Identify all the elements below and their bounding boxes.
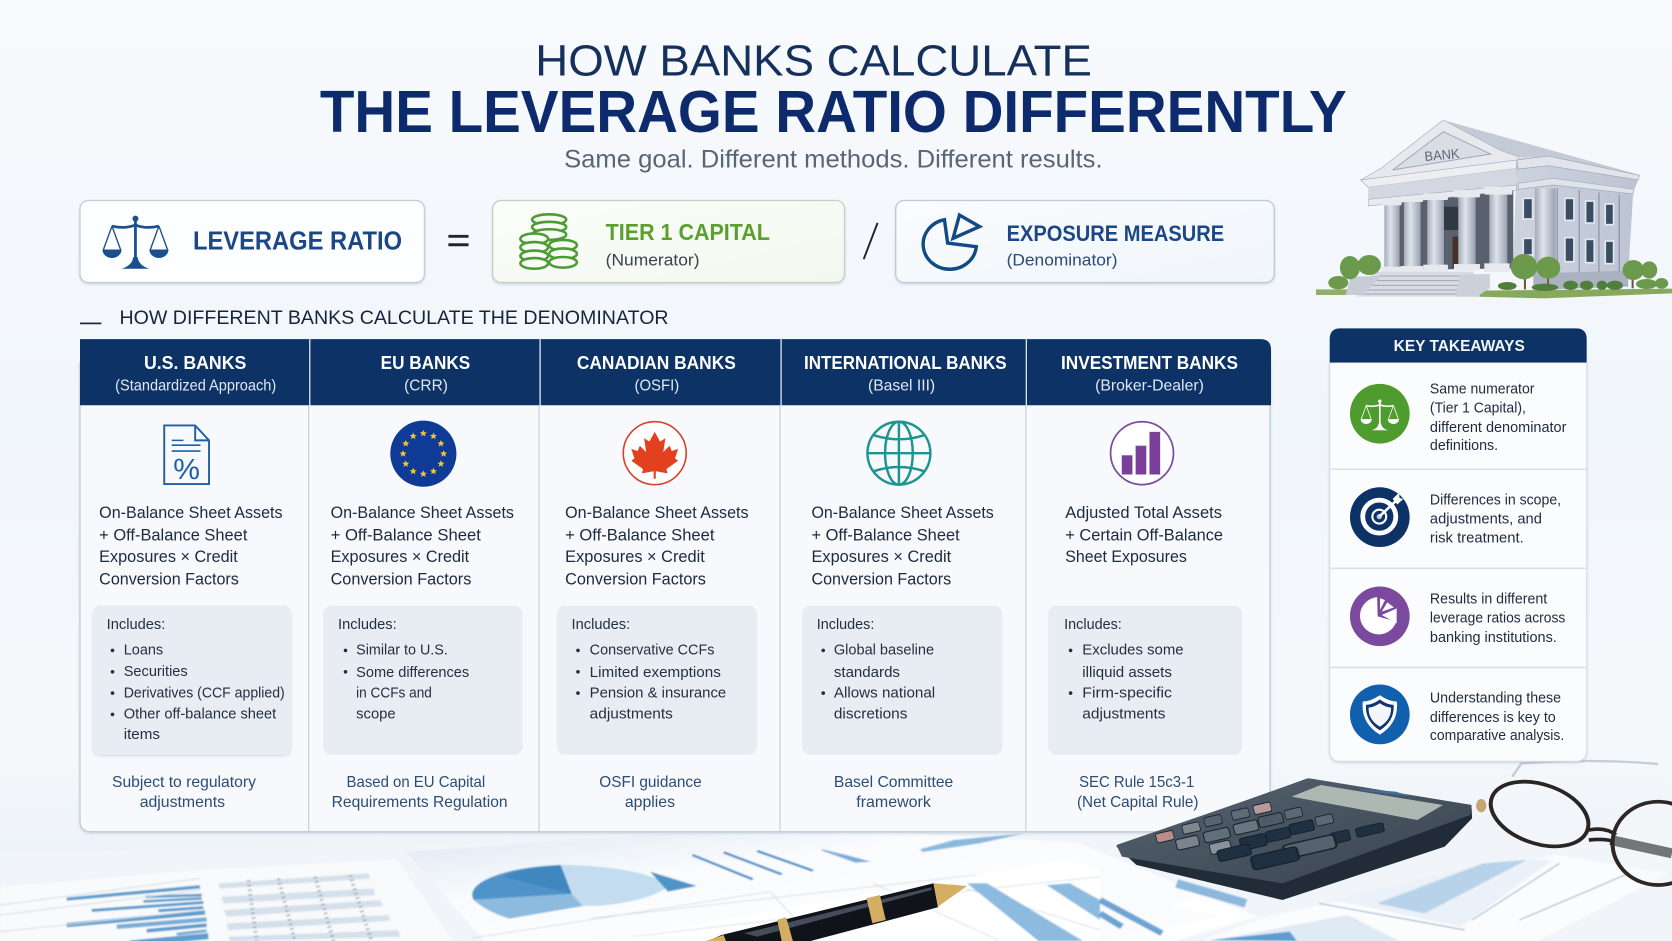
title: HOW BANKS CALCULATE bbox=[535, 37, 1092, 86]
steps bbox=[1346, 272, 1490, 297]
glasses bbox=[1476, 761, 1672, 885]
left bar chart bbox=[0, 878, 208, 941]
takeaway: differences: Differences in scope, bbox=[1430, 492, 1561, 508]
column: U.S. banks: + Off-Balance Sheet bbox=[99, 526, 248, 545]
column: U.S. banks: Loans bbox=[124, 642, 163, 659]
column: Canadian banks: Limited exemptions bbox=[590, 664, 721, 681]
formula: leverage ratio box: LEVERAGE RATIO bbox=[193, 228, 402, 256]
takeaway: understanding: differences is key to bbox=[1430, 710, 1556, 726]
column: international banks: discretions bbox=[834, 706, 907, 723]
takeaway: same numerator: different denominator bbox=[1430, 420, 1567, 436]
column: U.S. banks: Conversion Factors bbox=[99, 569, 239, 588]
formula: tier 1 capital box: TIER 1 CAPITAL bbox=[606, 219, 770, 245]
column: international banks: INTERNATIONAL BANKS bbox=[804, 353, 1007, 373]
column: investment banks: Includes: bbox=[1064, 616, 1122, 633]
column: investment banks: (Broker-Dealer) bbox=[1095, 377, 1204, 394]
slash bbox=[864, 223, 878, 259]
takeaway: understanding bbox=[1350, 685, 1564, 744]
column: EU banks: Conversion Factors bbox=[331, 569, 471, 588]
column: EU banks: EU BANKS bbox=[381, 353, 470, 373]
column: international banks: Global baseline bbox=[834, 642, 934, 659]
column: U.S. banks: U.S. BANKS bbox=[144, 353, 246, 373]
trees and shrubs bbox=[1328, 254, 1668, 291]
column: EU banks: (CRR) bbox=[404, 377, 448, 394]
left data table bbox=[218, 870, 405, 941]
column: international banks: Basel Committee bbox=[834, 774, 953, 791]
formula: exposure measure box: EXPOSURE MEASURE bbox=[1007, 221, 1224, 246]
column: investment banks: Sheet Exposures bbox=[1065, 547, 1187, 566]
pediment bbox=[1361, 120, 1518, 206]
column: international banks: framework bbox=[856, 794, 931, 811]
column: international banks: standards bbox=[834, 664, 900, 681]
takeaway: results: leverage ratios across bbox=[1430, 611, 1565, 627]
calculator bbox=[1116, 778, 1472, 900]
columns bbox=[1381, 187, 1512, 272]
column: EU banks: Similar to U.S. bbox=[356, 642, 448, 659]
takeaway: results bbox=[1350, 586, 1565, 646]
column: international banks: Conversion Factors bbox=[811, 569, 951, 588]
takeaway: understanding: comparative analysis. bbox=[1430, 728, 1564, 744]
takeaway: same numerator: (Tier 1 Capital), bbox=[1430, 401, 1526, 417]
icon: bar chart bbox=[1111, 422, 1173, 485]
takeaway: understanding: Understanding these bbox=[1430, 691, 1561, 707]
column: international banks: Allows national bbox=[834, 684, 935, 701]
icon: pie chart bbox=[923, 215, 980, 269]
title bbox=[320, 37, 1347, 145]
column: U.S. banks: Subject to regulatory bbox=[112, 774, 256, 791]
column: Canadian banks: On-Balance Sheet Assets bbox=[565, 503, 749, 522]
formula: leverage ratio box bbox=[80, 200, 424, 283]
column: U.S. banks bbox=[93, 353, 291, 811]
column: EU banks bbox=[323, 353, 523, 811]
formula: tier 1 capital box: (Numerator) bbox=[606, 251, 700, 270]
column: U.S. banks: Exposures × Credit bbox=[99, 547, 238, 566]
column: Canadian banks: Exposures × Credit bbox=[565, 547, 705, 566]
comparison table bbox=[80, 339, 1271, 832]
icon: coin stacks bbox=[520, 214, 577, 269]
equals sign: = bbox=[447, 223, 470, 260]
column: investment banks: INVESTMENT BANKS bbox=[1061, 353, 1238, 373]
column: Canadian banks: adjustments bbox=[590, 706, 673, 723]
column: Canadian banks: OSFI guidance bbox=[599, 774, 702, 791]
icon: maple leaf bbox=[623, 422, 686, 485]
column: Canadian banks bbox=[557, 353, 757, 811]
column: Canadian banks: CANADIAN BANKS bbox=[577, 353, 736, 373]
center document rows bbox=[471, 875, 1100, 941]
portico interior bbox=[1397, 190, 1513, 270]
column: U.S. banks: (Standardized Approach) bbox=[115, 377, 276, 394]
column: international banks: + Off-Balance Sheet bbox=[811, 526, 960, 545]
column: international banks: On-Balance Sheet Assets bbox=[811, 503, 994, 522]
takeaway: differences bbox=[1350, 487, 1561, 547]
pediment: BANK bbox=[1424, 146, 1460, 164]
column: international banks: Includes: bbox=[817, 616, 874, 633]
column: U.S. banks: Includes: bbox=[107, 616, 165, 633]
formula: exposure measure box bbox=[896, 200, 1274, 283]
panel: key takeaways: KEY TAKEAWAYS bbox=[1394, 338, 1525, 355]
column: EU banks: + Off-Balance Sheet bbox=[331, 526, 481, 545]
column: international banks: Exposures × Credit bbox=[811, 547, 952, 566]
icon: balance scale bbox=[102, 216, 169, 269]
column: Canadian banks: Conservative CCFs bbox=[590, 642, 714, 659]
column: EU banks: Some differences bbox=[356, 664, 469, 681]
column: Canadian banks: Includes: bbox=[572, 616, 630, 633]
column: investment banks: SEC Rule 15c3-1 bbox=[1079, 774, 1194, 791]
column: investment banks: Adjusted Total Assets bbox=[1065, 503, 1222, 522]
section heading: HOW DIFFERENT BANKS CALCULATE THE DENOMINATOR bbox=[119, 308, 669, 329]
takeaway: results: Results in different bbox=[1430, 592, 1547, 608]
icon: globe bbox=[867, 422, 930, 485]
column: U.S. banks: items bbox=[124, 726, 160, 743]
column: U.S. banks: adjustments bbox=[140, 794, 225, 811]
column: Canadian banks: (OSFI) bbox=[634, 377, 679, 394]
subtitle: Same goal. Different methods. Different results. bbox=[564, 146, 1103, 173]
takeaway: differences: risk treatment. bbox=[1430, 531, 1524, 547]
pie chart bbox=[472, 833, 1025, 919]
column: EU banks: Requirements Regulation bbox=[332, 794, 508, 811]
column: U.S. banks: Derivatives (CCF applied) bbox=[124, 684, 285, 701]
column: investment banks: (Net Capital Rule) bbox=[1077, 794, 1199, 811]
column: EU banks: in CCFs and bbox=[356, 684, 432, 701]
column: investment banks bbox=[1048, 353, 1242, 811]
column: Canadian banks: applies bbox=[625, 794, 675, 811]
column: international banks: (Basel III) bbox=[868, 377, 935, 394]
column: EU banks: Based on EU Capital bbox=[347, 774, 485, 791]
financial papers illustration bbox=[0, 821, 1672, 941]
bank building illustration bbox=[1316, 120, 1672, 298]
takeaway: differences: adjustments, and bbox=[1430, 512, 1542, 528]
column: Canadian banks: Pension & insurance bbox=[590, 684, 726, 701]
table background bbox=[80, 363, 1270, 832]
panel: key takeaways bbox=[1330, 328, 1587, 761]
column: investment banks: Firm-specific bbox=[1082, 684, 1172, 701]
column: EU banks: Includes: bbox=[338, 616, 397, 633]
column: U.S. banks: Securities bbox=[124, 663, 188, 680]
right papers bbox=[1100, 855, 1669, 941]
column: EU banks: On-Balance Sheet Assets bbox=[331, 503, 514, 522]
icon: EU flag circle bbox=[390, 421, 456, 487]
takeaway: same numerator bbox=[1350, 381, 1567, 454]
takeaway: same numerator: definitions. bbox=[1430, 438, 1498, 454]
column: EU banks: scope bbox=[356, 706, 396, 723]
column: investment banks: Excludes some bbox=[1082, 642, 1184, 659]
formula: tier 1 capital box bbox=[493, 200, 845, 283]
icon: percent document bbox=[164, 425, 209, 486]
column: Canadian banks: Conversion Factors bbox=[565, 569, 706, 588]
takeaway: results: banking institutions. bbox=[1430, 630, 1557, 646]
takeaway: same numerator: Same numerator bbox=[1430, 381, 1535, 397]
column: U.S. banks: Other off-balance sheet bbox=[124, 706, 277, 723]
table header band bbox=[80, 339, 1271, 405]
column: EU banks: Exposures × Credit bbox=[331, 547, 470, 566]
column: international banks bbox=[802, 353, 1007, 811]
icon: percent document: % bbox=[173, 454, 200, 486]
formula: exposure measure box: (Denominator) bbox=[1007, 251, 1118, 270]
column: investment banks: illiquid assets bbox=[1082, 664, 1172, 681]
column: Canadian banks: + Off-Balance Sheet bbox=[565, 526, 715, 545]
grass bbox=[1316, 289, 1672, 298]
column: investment banks: + Certain Off-Balance bbox=[1065, 526, 1223, 545]
roof and side wall bbox=[1443, 120, 1640, 290]
title: THE LEVERAGE RATIO DIFFERENTLY bbox=[320, 78, 1347, 145]
column: U.S. banks: On-Balance Sheet Assets bbox=[99, 503, 283, 522]
pen bbox=[706, 883, 967, 941]
column: investment banks: adjustments bbox=[1082, 706, 1165, 723]
